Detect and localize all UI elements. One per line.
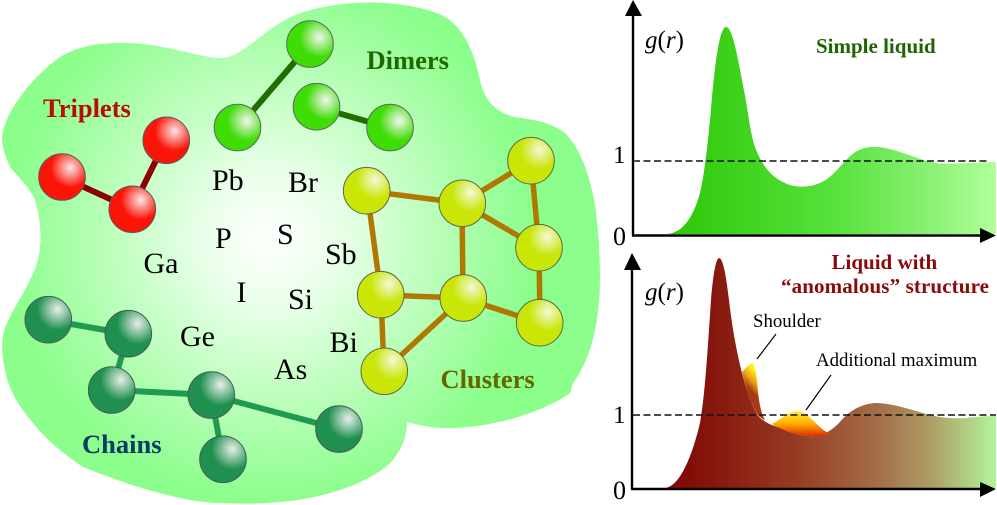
dimer bonds: [238, 44, 390, 128]
symbol Ge: Ge: [180, 320, 215, 353]
y axis arrow: [625, 0, 642, 16]
dashed reference line at 1: [633, 414, 996, 416]
tick label 1: 1: [613, 402, 626, 429]
element symbols: [144, 164, 358, 386]
axes: [632, 12, 984, 236]
heading: Triplets: Triplets: [43, 93, 131, 123]
symbol Bi: Bi: [330, 326, 358, 359]
shoulder annotation: [753, 311, 822, 359]
symbol Si: Si: [288, 283, 313, 316]
additional maximum highlight: [772, 411, 831, 436]
shoulder annotation: Shoulder: [753, 311, 822, 332]
shoulder highlight: [742, 363, 765, 420]
title: liquid with anomalous structure: [781, 250, 989, 298]
chart: anomalous liquid g(r): [613, 250, 996, 505]
additional maximum annotation: [806, 350, 978, 410]
cluster atoms: [343, 137, 563, 395]
chains group: [25, 296, 362, 483]
symbol Pb: Pb: [212, 164, 244, 197]
tick label 0: 0: [613, 476, 626, 505]
additional maximum annotation: Additional maximum: [816, 350, 978, 371]
dashed reference line at 1: [633, 160, 990, 162]
symbol I: I: [236, 276, 246, 309]
triplet atoms: [39, 117, 190, 233]
symbol Ga: Ga: [144, 247, 178, 280]
y axis label: g(r): [645, 279, 684, 306]
y axis arrow: [624, 253, 641, 270]
symbol P: P: [215, 222, 232, 255]
anomalous liquid curve area: [665, 258, 996, 488]
simple liquid curve area: [667, 27, 996, 234]
dimer atoms: [214, 21, 413, 151]
heading: Clusters: Clusters: [440, 364, 535, 394]
tick label 0: 0: [613, 222, 626, 251]
heading: Dimers: Dimers: [366, 45, 449, 75]
cluster bonds: [367, 161, 540, 371]
triplet bonds: [62, 140, 166, 209]
title: liquid with anomalous structure: “anomalous” structure: [781, 274, 989, 298]
tick label 1: 1: [613, 142, 626, 169]
triplets group: [39, 117, 190, 233]
symbol As: As: [274, 353, 307, 386]
clusters group: [343, 137, 563, 395]
x axis arrow: [980, 228, 996, 243]
dimers group: [214, 21, 413, 151]
title: liquid with anomalous structure: Liquid with: [832, 250, 937, 274]
title: simple liquid: Simple liquid: [816, 34, 936, 58]
background blob: [2, 2, 600, 504]
y axis label: g(r): [645, 27, 684, 54]
symbol Br: Br: [288, 166, 318, 199]
symbol S: S: [277, 218, 294, 251]
chain bonds: [48, 320, 339, 459]
axes: [631, 265, 984, 489]
heading: Chains: Chains: [82, 429, 162, 459]
chain atoms: [25, 296, 362, 483]
x axis arrow: [980, 482, 996, 497]
chart: simple liquid g(r): [613, 0, 996, 251]
symbol Sb: Sb: [325, 238, 357, 271]
